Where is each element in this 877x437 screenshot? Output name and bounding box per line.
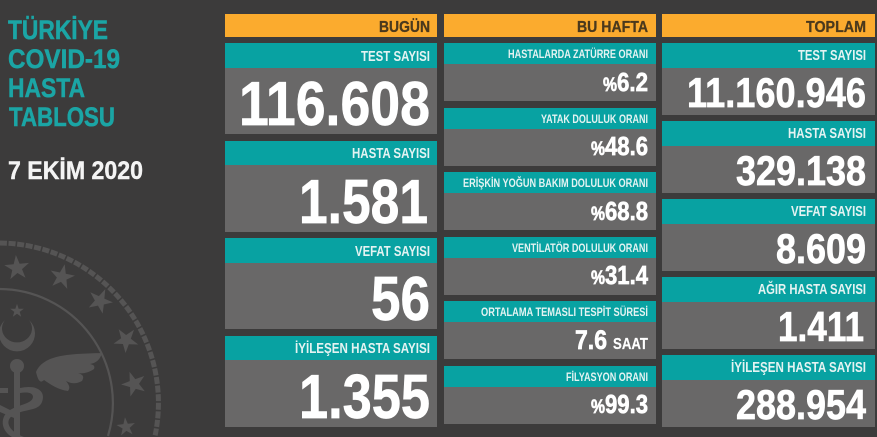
card: vefat sayısı: 56	[371, 265, 430, 334]
card: hasta sayısı: 1.581	[299, 168, 428, 237]
card: test sayısı	[225, 43, 437, 139]
card: ventilatör doluluk oranı: VENTİLATÖR DOLULUK ORANI	[512, 240, 648, 255]
heading: bu hafta: BU HAFTA	[577, 19, 648, 36]
emblem: ministry of health seal watermark	[0, 243, 158, 437]
card: hastalarda zatürre oranı: 6.2	[617, 67, 648, 97]
panel: bugün	[225, 14, 437, 432]
card: hasta sayısı: HASTA SAYISI	[352, 145, 430, 162]
title: TÜRKİYE	[8, 15, 108, 45]
card: yatak doluluk oranı: YATAK DOLULUK ORANI	[541, 112, 648, 126]
heading: toplam: TOPLAM	[806, 19, 866, 36]
card: hastalarda zatürre oranı: %	[603, 75, 617, 96]
card: test sayısı toplam	[662, 43, 875, 116]
card: erişkin yoğun bakım doluluk oranı	[444, 172, 656, 230]
card: erişkin yoğun bakım doluluk oranı: %	[591, 204, 605, 225]
card: yatak doluluk oranı: %	[591, 139, 605, 160]
heading: toplam	[662, 14, 875, 37]
card: filyasyon oranı	[444, 366, 656, 424]
card: hasta sayısı toplam	[662, 121, 875, 194]
card: ventilatör doluluk oranı: %	[591, 268, 605, 289]
card: iyileşen hasta sayısı: 1.355	[299, 363, 430, 432]
panel: bu hafta	[444, 14, 656, 424]
card: filyasyon oranı: 99.3	[605, 389, 648, 419]
card: ortalama temaslı tespit süresi: ORTALAMA TEMASLI TESPİT SÜRESİ	[481, 304, 648, 319]
card: ventilatör doluluk oranı	[444, 237, 656, 295]
card: ortalama temaslı tespit süresi: SAAT	[613, 336, 648, 353]
heading: bugün: BUGÜN	[379, 17, 430, 36]
title: TABLOSU	[9, 102, 115, 132]
card: yatak doluluk oranı	[444, 108, 656, 166]
card: yatak doluluk oranı: 48.6	[605, 131, 648, 161]
panel: toplam	[662, 14, 875, 428]
card: test sayısı: TEST SAYISI	[361, 48, 430, 65]
card: hastalarda zatürre oranı	[444, 43, 656, 101]
card: iyileşen hasta sayısı	[225, 336, 437, 432]
heading: bu hafta	[444, 14, 656, 37]
card: ventilatör doluluk oranı: 31.4	[605, 260, 648, 290]
card: ortalama temaslı tespit süresi: 7.6	[575, 325, 607, 355]
card: vefat sayısı: VEFAT SAYISI	[355, 243, 430, 260]
card: filyasyon oranı: %	[591, 397, 605, 418]
title: COVID-19	[8, 44, 120, 74]
card: filyasyon oranı: FİLYASYON ORANI	[566, 369, 648, 384]
card: vefat sayısı	[225, 238, 437, 334]
title	[8, 15, 120, 132]
card: iyileşen hasta sayısı toplam	[662, 355, 875, 428]
card: ağır hasta sayısı toplam	[662, 277, 875, 350]
heading: bugün	[225, 14, 437, 37]
card: hastalarda zatürre oranı: HASTALARDA ZATÜRRE ORANI	[508, 46, 648, 61]
card: iyileşen hasta sayısı: İYİLEŞEN HASTA SAYISI	[295, 340, 430, 357]
card: vefat sayısı toplam	[662, 199, 875, 272]
date: 7 EKİM 2020	[8, 157, 143, 185]
title: HASTA	[8, 73, 85, 103]
card: ortalama temaslı tespit süresi	[444, 301, 656, 359]
card: erişkin yoğun bakım doluluk oranı: ERİŞKİN YOĞUN BAKIM DOLULUK ORANI	[463, 175, 648, 190]
card: erişkin yoğun bakım doluluk oranı: 68.8	[605, 196, 648, 226]
card: test sayısı: 116.608	[239, 70, 430, 139]
card: hasta sayısı	[225, 141, 437, 237]
